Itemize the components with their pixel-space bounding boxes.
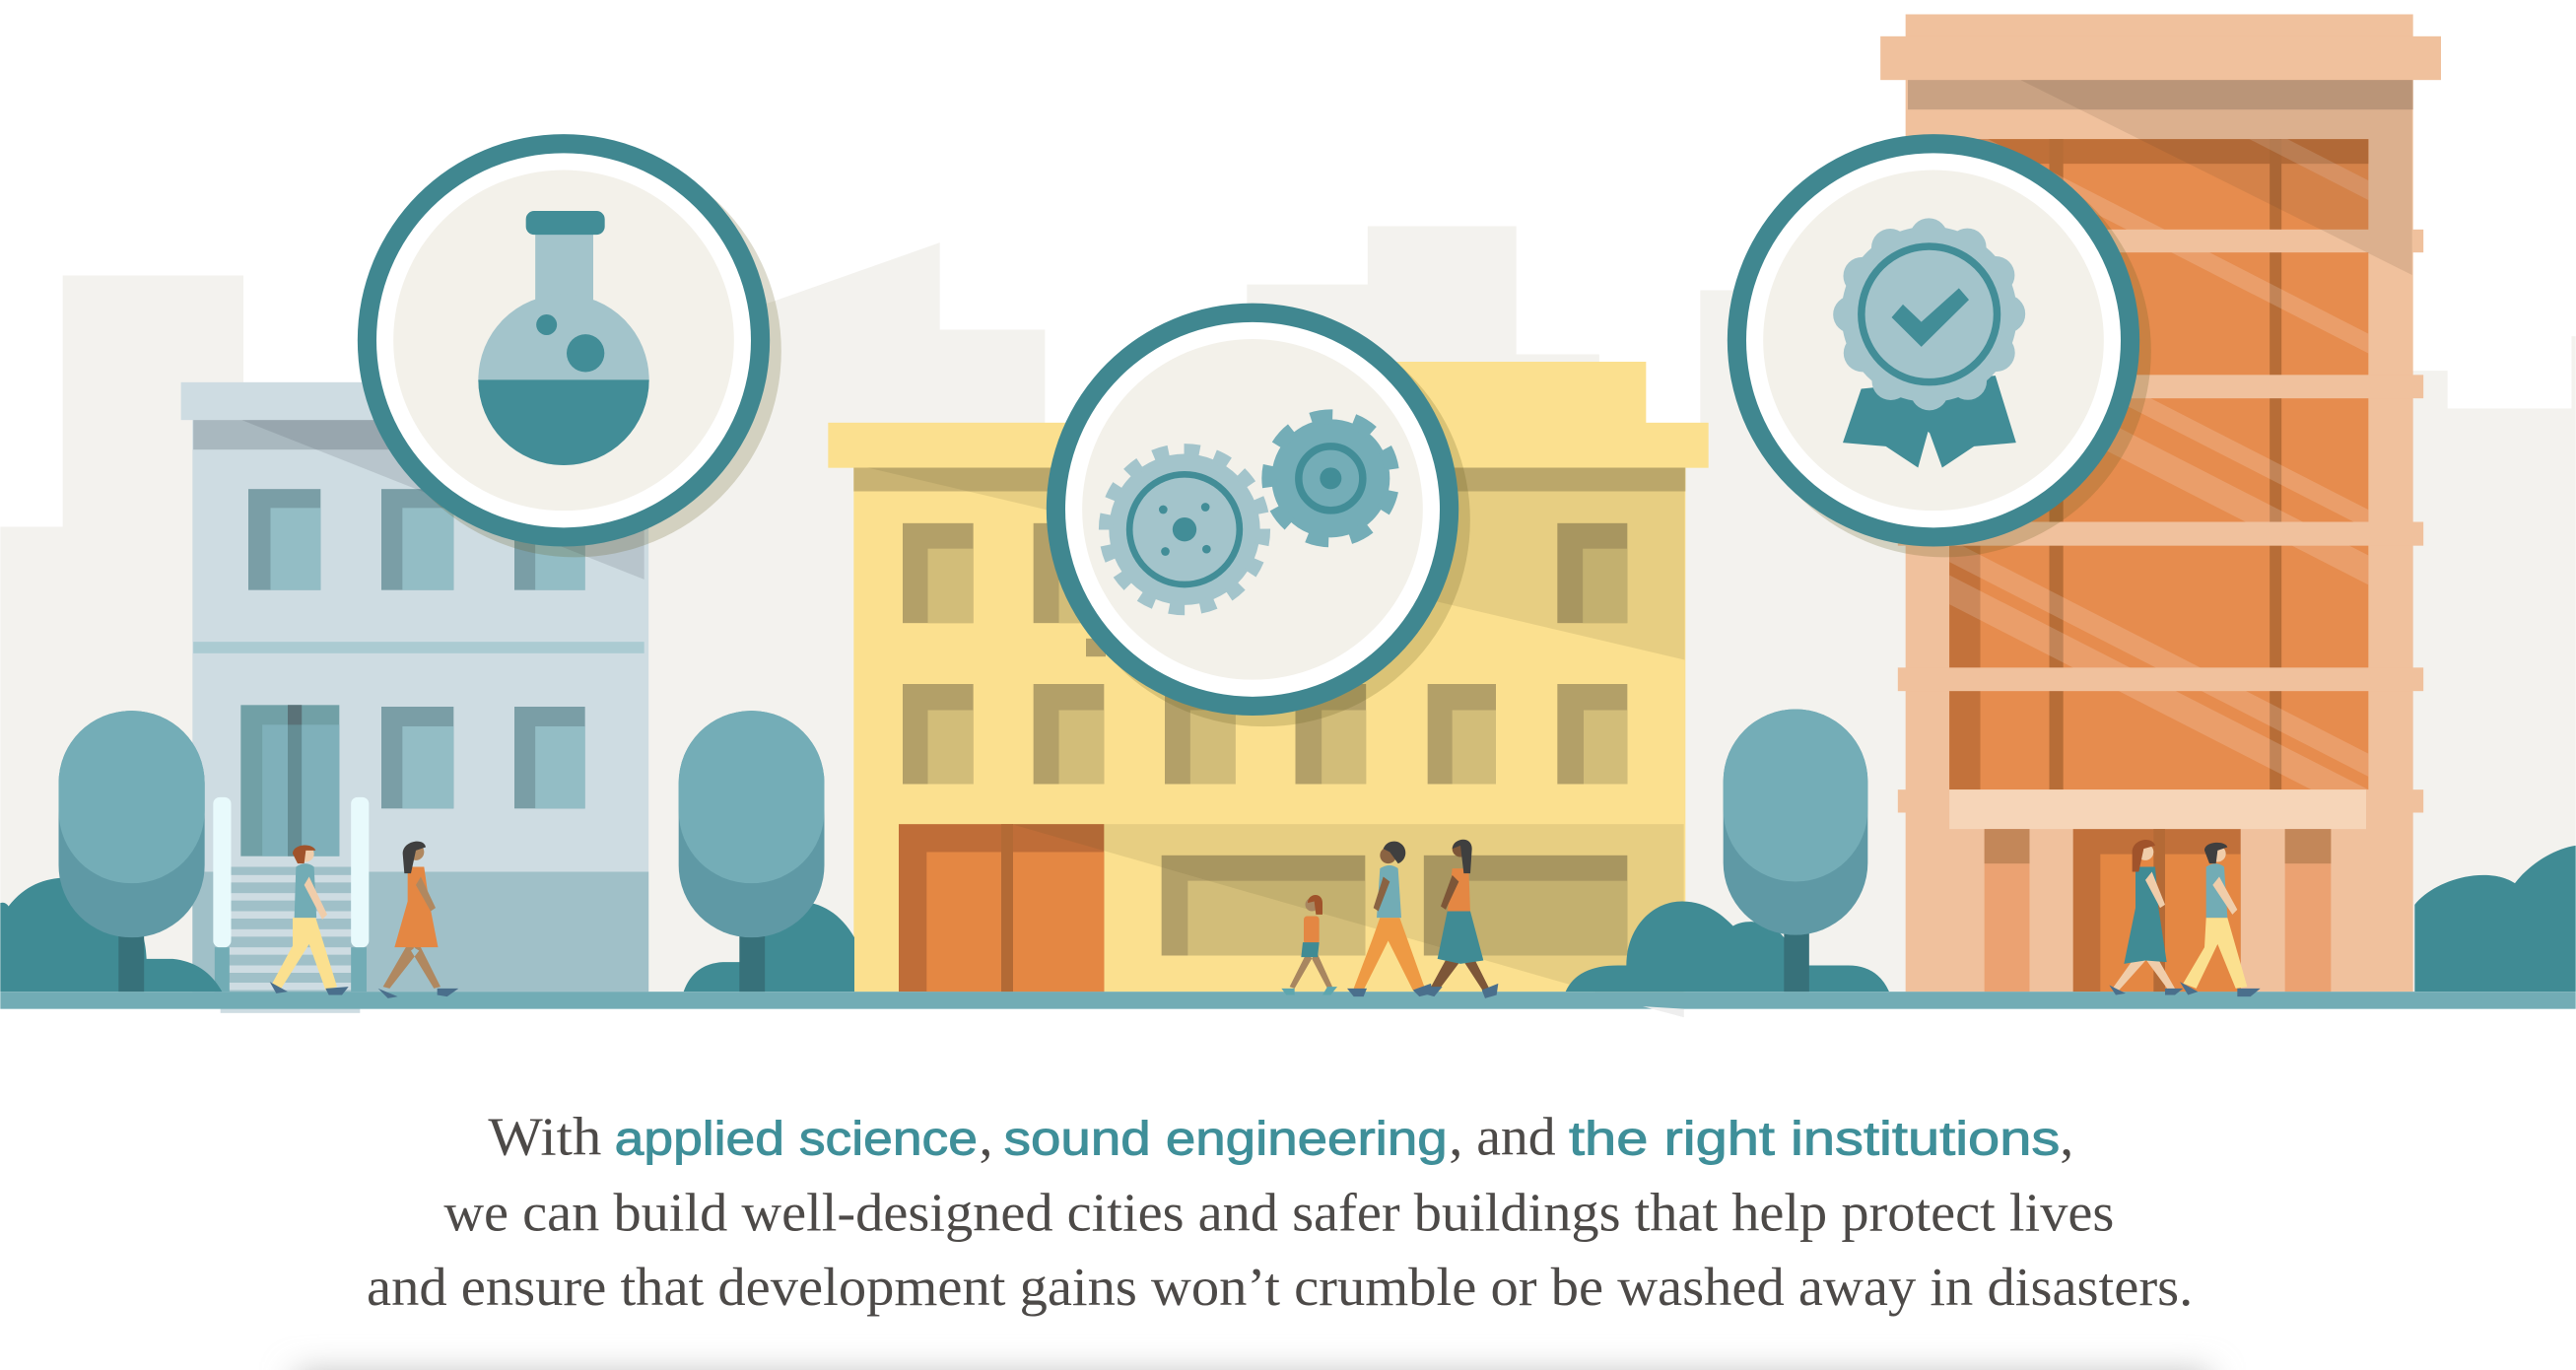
yellow block windows [903,523,1627,785]
city scene [0,0,2576,1017]
circle: sound engineering gears [1047,304,1470,726]
text block: closing statement: sound engineering [1004,1113,1448,1166]
tree middle [679,711,824,992]
text block: closing statement: applied science [615,1113,978,1166]
stair posts [213,797,369,992]
text block: closing statement: , [2060,1107,2073,1167]
tower glass [1949,139,2369,789]
ground strip [0,992,2576,1009]
circle: applied science flask [358,134,781,557]
house door [240,705,339,856]
background skyline [0,227,2576,992]
tower floor bands [1898,230,2423,813]
building: blue house [181,382,657,1013]
tower door [2073,829,2241,992]
shop windows [1162,856,1627,956]
house windows [248,489,585,808]
bushes [0,846,2576,992]
person: woman in teal skirt [1423,840,1498,998]
person: woman in orange dress [378,842,458,998]
orange door [899,824,1104,992]
tree left [59,711,205,992]
circle: right institutions badge [1728,134,2151,557]
tree right [1724,710,1867,992]
text block: closing statement [367,1107,2193,1317]
tower side panels [1985,829,2331,992]
text block: closing statement: , and [1449,1107,1556,1167]
text block: closing statement: , [980,1107,992,1167]
icon: flask [478,211,649,465]
text block: closing statement: With [488,1107,601,1167]
building: yellow block [828,362,1709,1017]
person: man in orange trousers [1347,842,1433,996]
text block: closing statement: we can build well-designed cities and safer buildings that help protect lives [443,1182,2114,1242]
building: orange tower [1880,0,2441,992]
text block: closing statement: and ensure that development gains won’t crumble or be washed away in disasters. [367,1257,2193,1317]
person: child [1281,895,1337,995]
person: man in yellow trousers [2180,843,2261,996]
house stairs [221,867,360,1013]
icon: rosette badge [1841,227,2017,468]
person: woman in teal dress [2109,840,2183,995]
icon: large gear [1106,450,1263,608]
person: man on stairs [270,845,349,995]
icon: small gear [1257,405,1403,551]
text block: closing statement: the right institutions [1569,1113,2060,1166]
